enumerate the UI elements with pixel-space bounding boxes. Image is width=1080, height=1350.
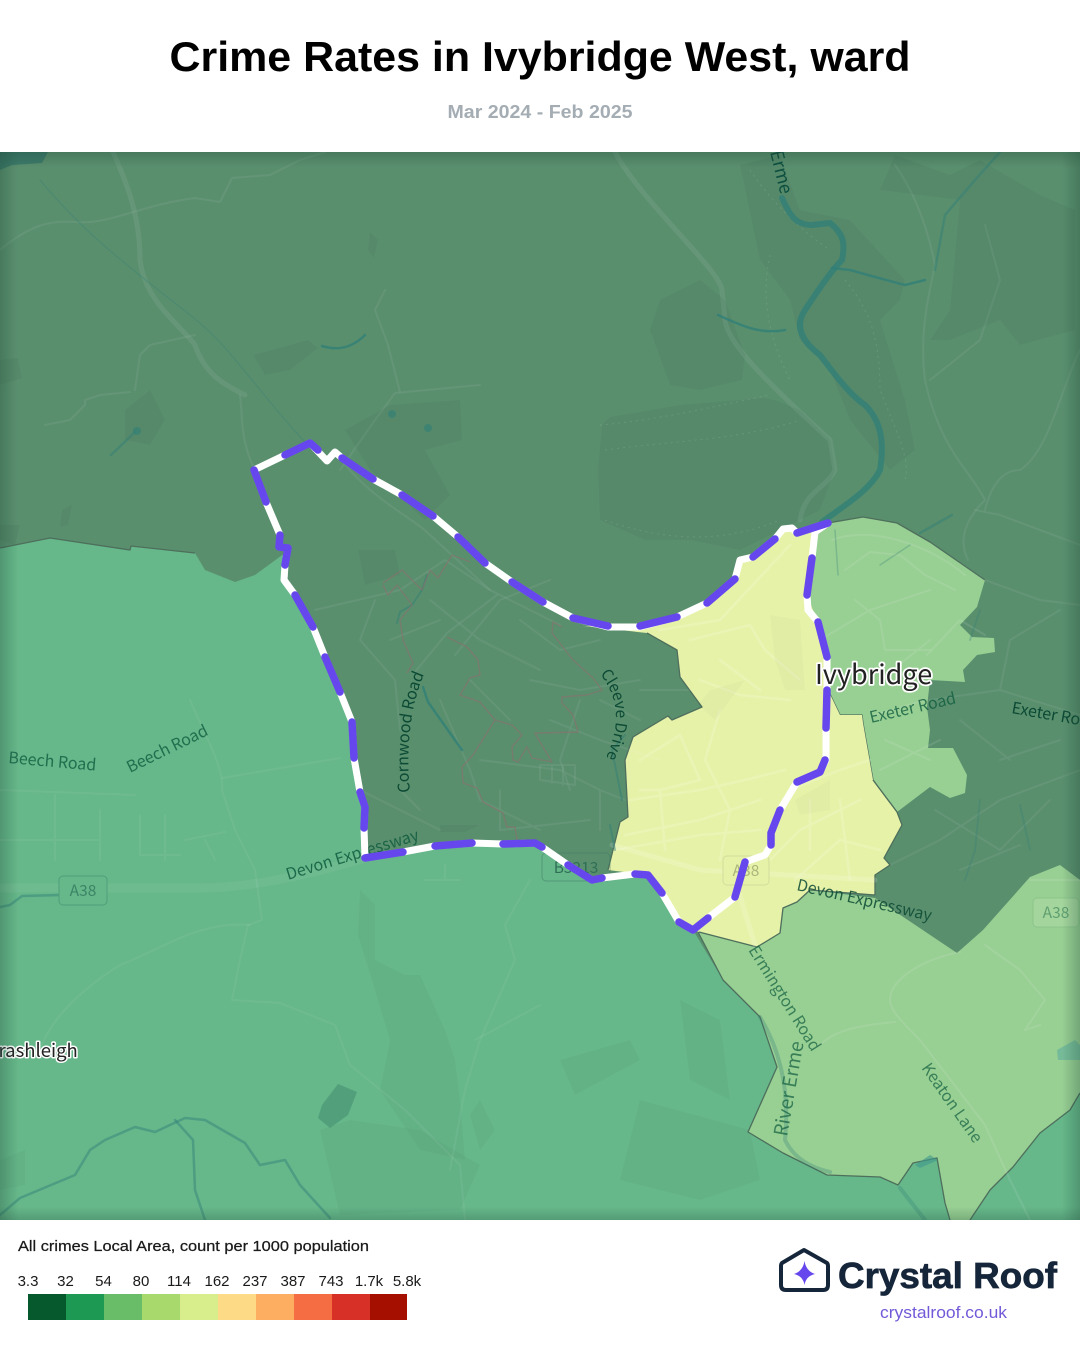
north roads and tracks — [0, 152, 1080, 560]
legend scale values: 743 — [318, 1273, 344, 1290]
road shield: A38 centre — [723, 856, 769, 885]
label: Exeter Road centre: Exeter Road — [867, 685, 958, 728]
ward boundary: Ivybridge West — [254, 443, 828, 930]
label: Beech Road west: Beech Road — [8, 744, 97, 776]
map panel — [0, 152, 1080, 1220]
label: Erme top: Erme — [764, 147, 800, 196]
region: yellow high-rate area — [583, 528, 902, 947]
legend — [18, 1238, 422, 1320]
legend scale values — [18, 1273, 422, 1290]
label: Keaton Lane: Keaton Lane — [917, 1057, 990, 1147]
road shield: A38 west — [59, 876, 107, 905]
legend scale values: 1.7k — [355, 1273, 384, 1290]
legend scale values: 162 — [204, 1273, 230, 1290]
south-east roads and river Erme — [760, 880, 1080, 1220]
legend scale values: 5.8k — [393, 1273, 422, 1290]
legend title: All crimes Local Area, count per 1000 population — [18, 1238, 369, 1255]
title: Crime Rates in Ivybridge West, ward — [170, 33, 910, 80]
road shield: A38 east: A38 — [1043, 901, 1069, 923]
label: Ivybridge place name: Ivybridge — [815, 653, 932, 692]
south-east dark-area streets — [890, 579, 1068, 881]
label: River Erme: River Erme — [766, 1039, 810, 1138]
rivers north — [40, 152, 1000, 533]
north-east streets — [820, 530, 985, 770]
logo url: crystalroof.co.uk — [880, 1304, 1008, 1322]
icon: house with star — [781, 1250, 828, 1290]
label: Devon Expressway east: Devon Expressway — [795, 871, 935, 926]
legend scale values: 54 — [95, 1273, 112, 1290]
ward streets — [315, 452, 690, 850]
legend scale values: 3.3 — [18, 1273, 38, 1290]
map text labels — [0, 152, 1080, 1143]
region: north-east light green — [807, 517, 995, 812]
yellow-area streets — [612, 545, 880, 945]
road shield: A38 west: A38 — [70, 879, 96, 901]
road shield: A38 east — [1033, 898, 1079, 927]
legend scale values: 80 — [133, 1273, 149, 1290]
legend scale values: 387 — [280, 1273, 306, 1290]
ward footpath traces — [383, 555, 602, 840]
subtitle: date range: Mar 2024 - Feb 2025 — [448, 101, 632, 122]
logo: Crystal Roof — [781, 1250, 1058, 1322]
road shield: B3213 — [542, 853, 610, 881]
label: Devon Expressway west: Devon Expressway — [282, 821, 422, 885]
road shield: A38 centre: A38 — [733, 859, 759, 881]
legend scale values: 32 — [57, 1273, 74, 1290]
legend scale values: 237 — [242, 1273, 268, 1290]
legend scale values: 114 — [167, 1273, 191, 1290]
label: Beech Road east: Beech Road — [122, 717, 211, 777]
map edge vignette — [0, 152, 1080, 1220]
region: south-west medium green — [0, 538, 1080, 1220]
label: Cornwood Road: Cornwood Road — [398, 670, 424, 792]
woodland patches north — [0, 152, 48, 170]
logo wordmark: Crystal Roof — [838, 1255, 1058, 1296]
south woodland patches — [318, 1084, 465, 1160]
south-west roads and streets — [0, 700, 540, 1220]
map background: dark green low-rate area — [0, 152, 1080, 974]
legend colour bar — [28, 1294, 407, 1320]
region: south-east light green — [698, 865, 1080, 1220]
rivers south-west — [0, 895, 330, 1220]
road shield: B3213: B3213 — [554, 856, 598, 878]
label: Ermington Road: Ermington Road — [744, 940, 828, 1055]
label: Cleeve Drive: Cleeve Drive — [602, 670, 627, 760]
